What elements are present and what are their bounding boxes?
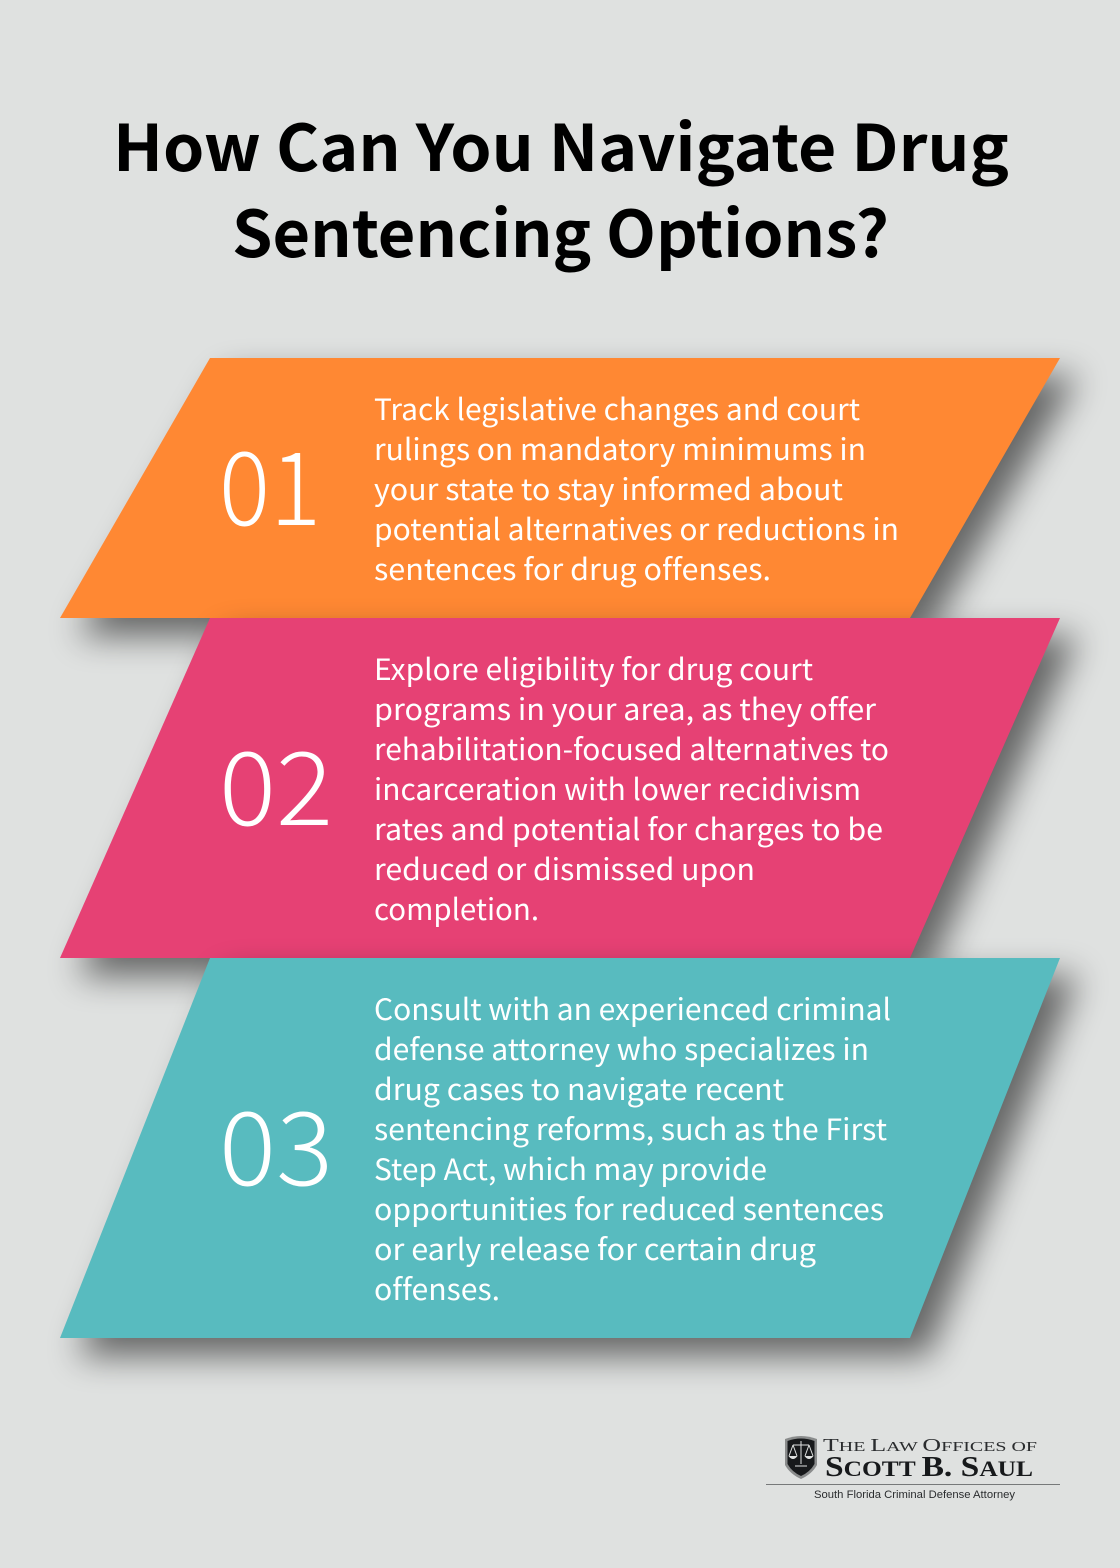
step 02 text: rates and potential for charges to be [374, 807, 883, 849]
step 03 text: defense attorney who specializes in [374, 1027, 869, 1069]
step 03 text [374, 987, 891, 1309]
step 02 text: incarceration with lower recidivism [374, 767, 861, 809]
step 02 text: programs in your area, as they offer [374, 687, 877, 729]
step 03 text: Consult with an experienced criminal [374, 987, 891, 1029]
icon: shield with scales [785, 1436, 817, 1479]
step number 02: 02 [219, 708, 333, 855]
step 01 text: rulings on mandatory minimums in [374, 427, 866, 469]
logo tagline: South Florida Criminal Defense Attorney [814, 1489, 1016, 1501]
step 03 text: or early release for certain drug [374, 1227, 816, 1269]
step 02 text: reduced or dismissed upon [374, 847, 755, 889]
step 02 text [374, 647, 889, 929]
step 02 text: Explore eligibility for drug court [374, 647, 813, 689]
step 02 text: completion. [374, 887, 539, 929]
step 01 text: potential alternatives or reductions in [374, 507, 899, 549]
step 03 text: offenses. [374, 1267, 500, 1309]
step 03 text: sentencing reforms, such as the First [374, 1107, 887, 1149]
logo: The Law Offices of Scott B. Saul: SCOTT B. S AUL [825, 1451, 1033, 1483]
logo text: T HE L AW O FFICES OF [823, 1435, 1038, 1455]
panel: step 01 [60, 358, 1078, 636]
panel: step 02 [60, 618, 1078, 976]
step 01 text: Track legislative changes and court [374, 387, 860, 429]
step 01 text: sentences for drug offenses. [374, 547, 771, 589]
step 01 text [374, 387, 899, 589]
title [113, 98, 1009, 276]
logo: The Law Offices of Scott B. Saul [766, 1435, 1060, 1501]
step number 03: 03 [219, 1068, 333, 1215]
panel: step 03 [60, 958, 1078, 1356]
step 03 text: drug cases to navigate recent [374, 1067, 784, 1109]
step 01 text: your state to stay informed about [374, 467, 843, 509]
step 03 text: opportunities for reduced sentences [374, 1187, 884, 1229]
title: How Can You Navigate Drug [113, 98, 1009, 190]
step 03 text: Step Act, which may provide [374, 1147, 767, 1189]
step number 01: 01 [219, 408, 321, 555]
title: Sentencing Options? [232, 184, 889, 276]
step 02 text: rehabilitation-focused alternatives to [374, 727, 889, 769]
